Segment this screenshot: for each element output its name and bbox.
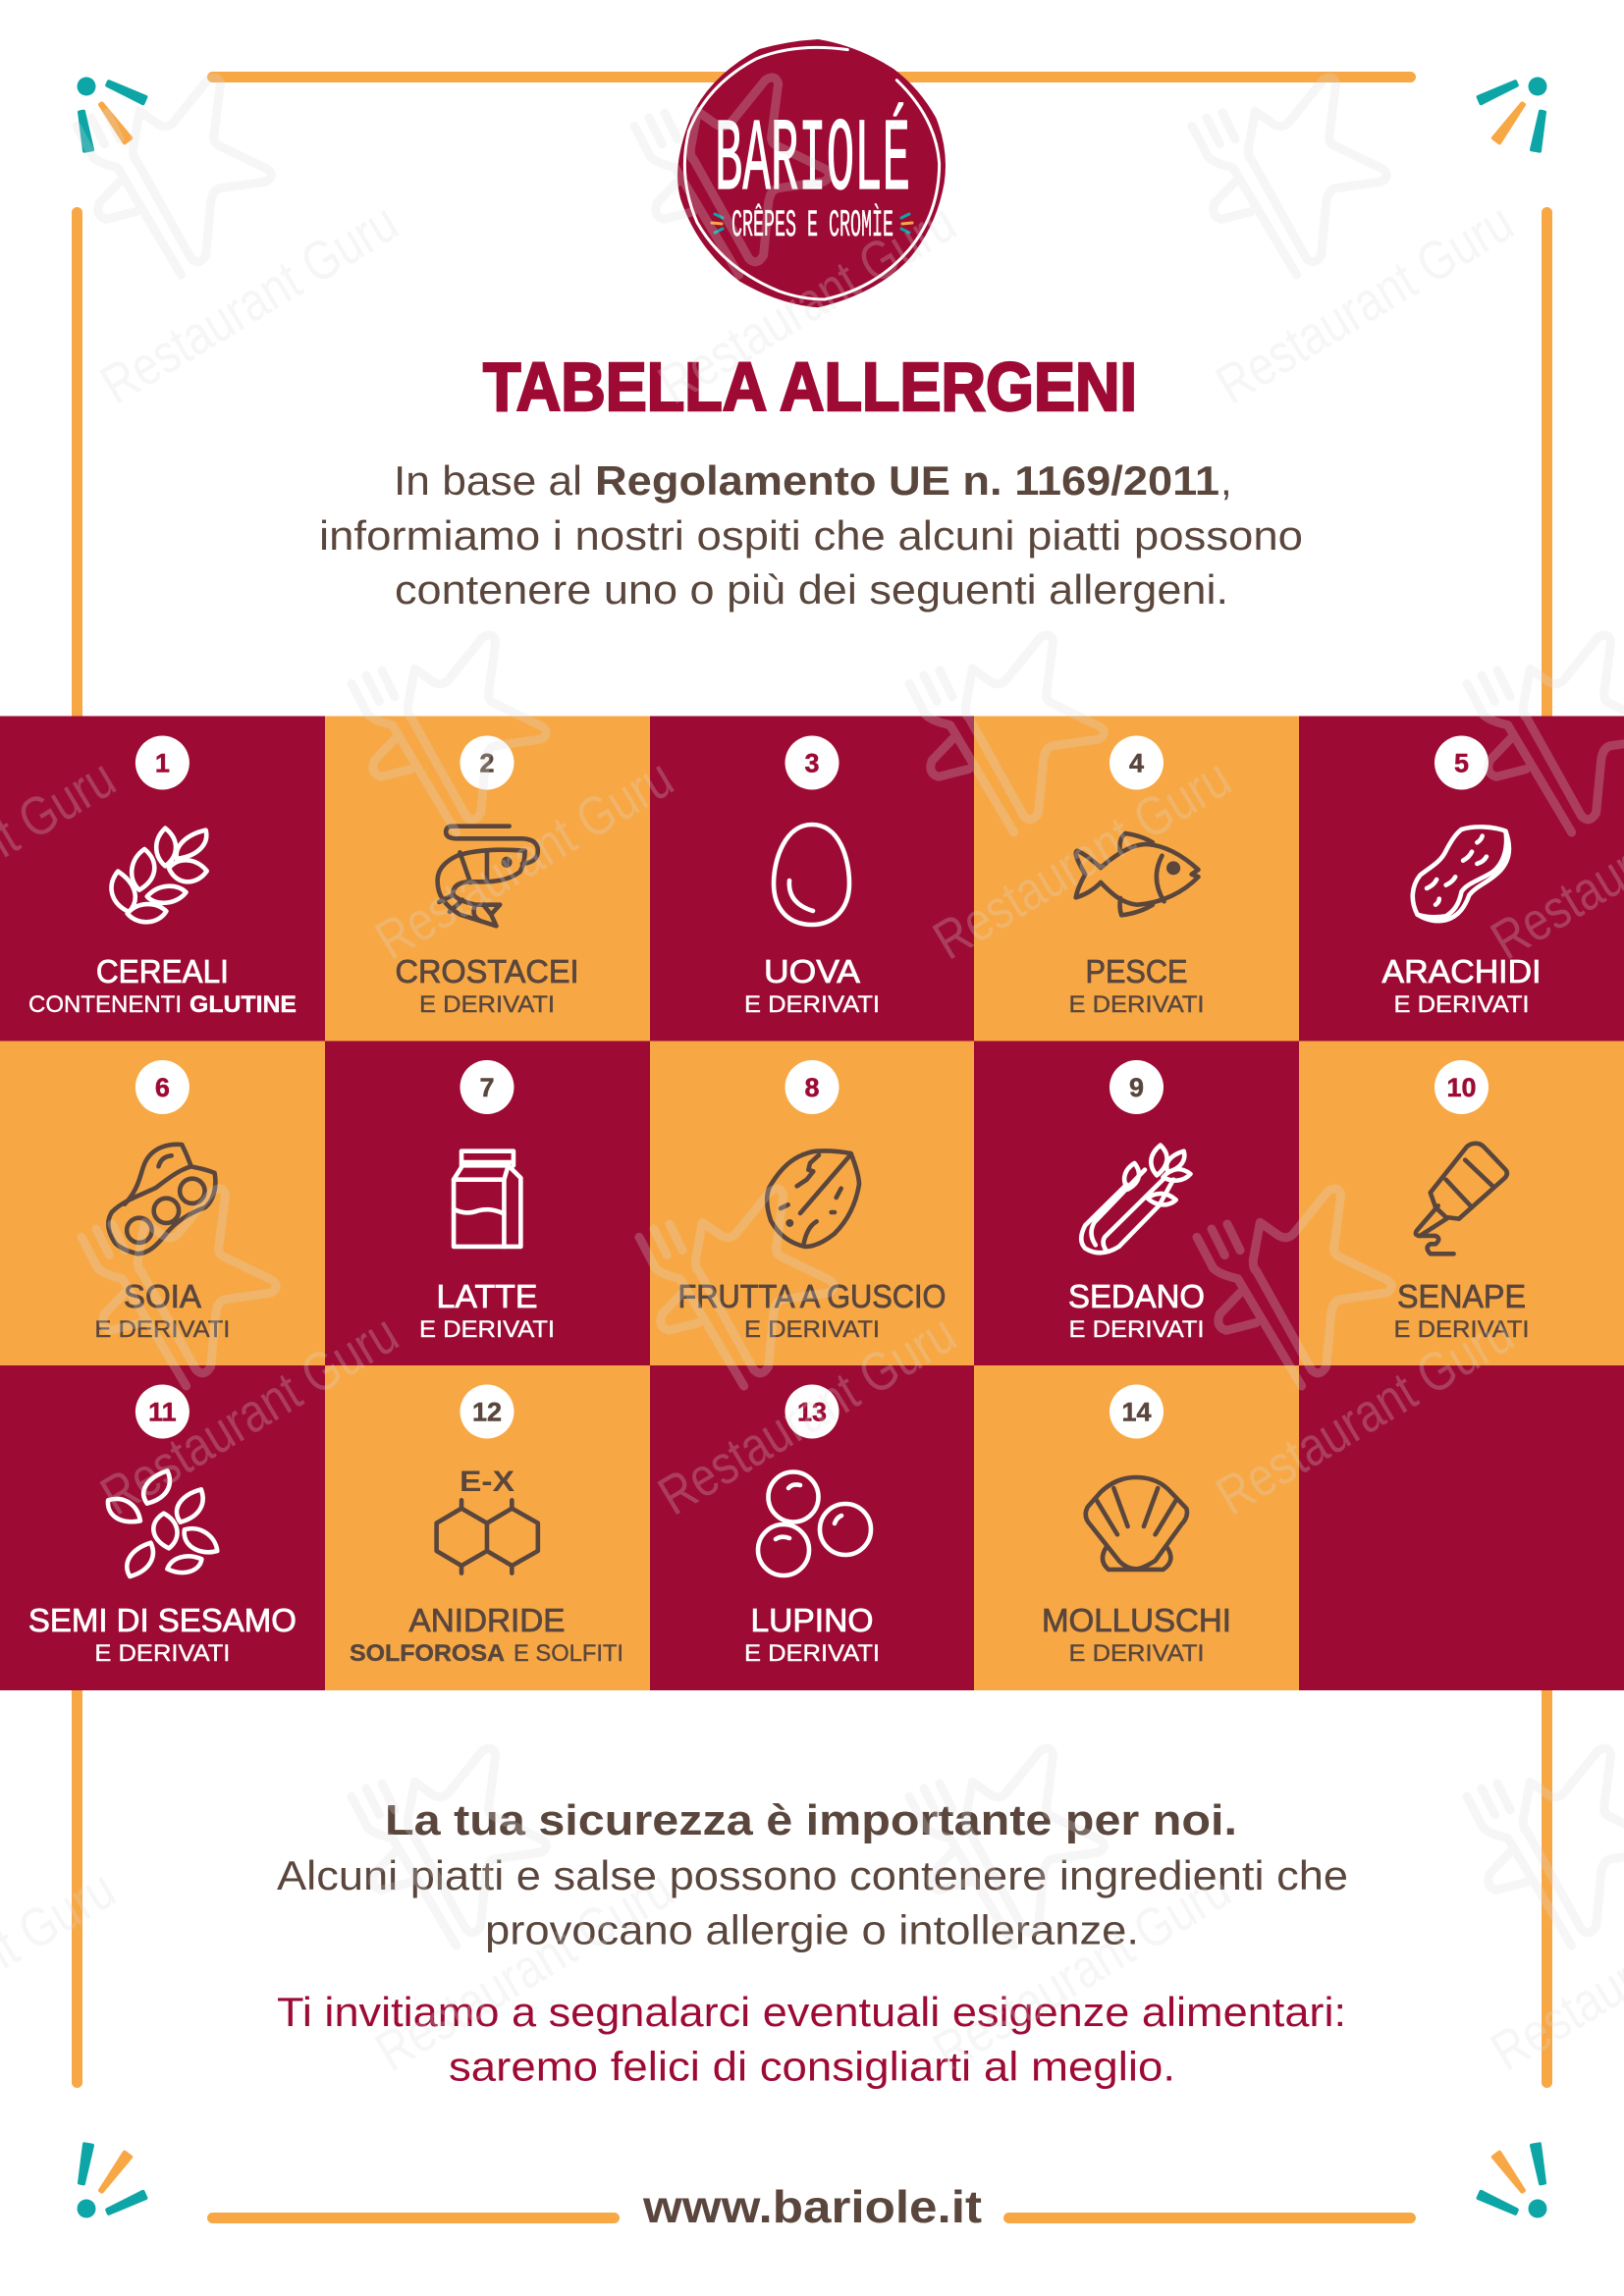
panel: 10 senape: 10 bbox=[1446, 1073, 1477, 1102]
panel: 3 uova: E DERIVATI bbox=[744, 991, 880, 1018]
intro text block: , bbox=[1220, 457, 1232, 504]
panel: 1 cereali: CEREALI bbox=[96, 953, 229, 989]
panel: 4 pesce: E DERIVATI bbox=[1068, 991, 1204, 1018]
panel: 12 anidride: E SOLFITI bbox=[514, 1640, 623, 1667]
watermark overlay: Restaurant Guru bbox=[923, 746, 1241, 971]
panel: 14 molluschi: MOLLUSCHI bbox=[1042, 1602, 1231, 1638]
icon: milk carton bbox=[454, 1151, 520, 1247]
panel: 14 molluschi bbox=[974, 1365, 1299, 1690]
icon: corner spark top-right bbox=[1479, 77, 1547, 151]
bottom frame lines bbox=[72, 1679, 1552, 2223]
panel: 3 uova: 3 bbox=[804, 748, 820, 777]
watermark overlay: Restaurant Guru bbox=[90, 1302, 408, 1526]
watermark overlay: Restaurant Guru bbox=[90, 190, 408, 415]
panel: 7 latte: 7 bbox=[479, 1073, 495, 1102]
allergen grid bbox=[0, 717, 1624, 1690]
panel: 1 cereali bbox=[0, 717, 325, 1041]
panel: 2 crostacei: 2 bbox=[479, 748, 495, 777]
panel: 7 latte: LATTE bbox=[436, 1278, 538, 1314]
panel: 3 uova: UOVA bbox=[764, 953, 860, 989]
panel: 8 frutta a guscio bbox=[650, 1041, 975, 1366]
panel: 8 frutta a guscio: E DERIVATI bbox=[744, 1316, 880, 1343]
text: invitation bbox=[277, 1989, 1346, 2089]
panel: 5 arachidi: 5 bbox=[1454, 748, 1469, 777]
panel: 12 anidride bbox=[325, 1365, 650, 1690]
panel: 13 lupino: E DERIVATI bbox=[744, 1640, 880, 1667]
watermark overlay: Restaurant Guru bbox=[648, 1302, 966, 1526]
icon: soy pod bbox=[108, 1145, 215, 1254]
panel: 7 latte: E DERIVATI bbox=[419, 1316, 555, 1343]
panel: 12 anidride: 12 bbox=[472, 1398, 502, 1427]
panel: 1 cereali: CONTENENTI bbox=[28, 991, 182, 1018]
intro text block: contenere uno o più dei seguenti allergeni. bbox=[395, 566, 1228, 613]
panel: 2 crostacei: CROSTACEI bbox=[395, 953, 579, 989]
footer text block bbox=[277, 1796, 1348, 2089]
text: invitation: saremo felici di consigliarti al meglio. bbox=[449, 2044, 1175, 2089]
panel: 4 pesce: 4 bbox=[1129, 748, 1144, 777]
title: TABELLA ALLERGENI bbox=[483, 348, 1137, 425]
panel: 13 lupino bbox=[650, 1365, 975, 1690]
text: invitation: Ti invitiamo a segnalarci eventuali esigenze alimentari: bbox=[277, 1989, 1346, 2035]
panel: 3 uova bbox=[650, 717, 975, 1041]
panel: 11 semi di sesamo: SEMI DI SESAMO bbox=[28, 1602, 297, 1638]
panel: 10 senape: E DERIVATI bbox=[1394, 1316, 1530, 1343]
panel: 14 molluschi: E DERIVATI bbox=[1068, 1640, 1204, 1667]
top frame lines bbox=[72, 72, 1552, 727]
website url: www.bariole.it bbox=[642, 2181, 982, 2232]
watermark overlay: Restaurant Guru bbox=[648, 190, 966, 415]
panel: 13 lupino: 13 bbox=[797, 1398, 827, 1427]
panel: 6 soia: E DERIVATI bbox=[94, 1316, 230, 1343]
icon: peanut bbox=[1413, 827, 1509, 921]
logo: Bariolé bbox=[677, 39, 946, 307]
icon: walnut bbox=[767, 1150, 859, 1247]
watermark overlay: Restaurant Guru bbox=[1206, 190, 1524, 415]
panel: 14 molluschi: 14 bbox=[1121, 1398, 1152, 1427]
intro text block: informiamo i nostri ospiti che alcuni piatti possono bbox=[319, 512, 1303, 559]
panel: 4 pesce bbox=[974, 717, 1299, 1041]
panel: 9 sedano bbox=[974, 1041, 1299, 1366]
text: allergy note: Alcuni piatti e salse possono contenere ingredienti che bbox=[277, 1852, 1348, 1898]
panel: empty crimson cell bbox=[1299, 1365, 1624, 1690]
icon: sesame seeds bbox=[108, 1470, 217, 1576]
text: allergy note bbox=[277, 1852, 1348, 1953]
panel: 10 senape: SENAPE bbox=[1397, 1278, 1526, 1314]
intro text block bbox=[319, 457, 1303, 613]
panel: 6 soia: 6 bbox=[155, 1073, 170, 1102]
panel: 11 semi di sesamo bbox=[0, 1365, 325, 1690]
intro text block: In base al bbox=[394, 457, 582, 504]
panel: 8 frutta a guscio: FRUTTA A GUSCIO bbox=[677, 1278, 947, 1314]
icon: fish bbox=[1076, 833, 1198, 915]
panel: 5 arachidi: ARACHIDI bbox=[1382, 953, 1542, 989]
panel: 11 semi di sesamo: E DERIVATI bbox=[94, 1640, 230, 1667]
icon: corner spark bottom-right bbox=[1479, 2144, 1547, 2218]
icon: corner spark top-left bbox=[77, 77, 145, 151]
watermark overlay: Restaurant Guru bbox=[365, 1857, 683, 2082]
panel: 12 anidride: ANIDRIDE bbox=[408, 1602, 566, 1638]
icon: shrimp bbox=[438, 827, 538, 926]
logo: Bariolé: BARIOLÉ bbox=[715, 102, 910, 220]
icon: lupin beans bbox=[758, 1472, 871, 1575]
watermark overlay: Restaurant Guru bbox=[365, 746, 683, 971]
logo: Bariolé: CRÊPES E CROMÌE bbox=[731, 203, 893, 247]
panel: 11 semi di sesamo: 11 bbox=[148, 1398, 177, 1427]
panel: 7 latte bbox=[325, 1041, 650, 1366]
icon: mustard bottle bbox=[1416, 1144, 1507, 1254]
icon: corner spark bottom-left bbox=[77, 2144, 145, 2218]
panel: 5 arachidi bbox=[1299, 717, 1624, 1041]
panel: 2 crostacei: E DERIVATI bbox=[419, 991, 555, 1018]
heading: safety: La tua sicurezza è importante per noi. bbox=[385, 1796, 1237, 1844]
panel: 9 sedano: SEDANO bbox=[1068, 1278, 1205, 1314]
text: allergy note: provocano allergie o intolleranze. bbox=[485, 1906, 1139, 1953]
intro text block: Regolamento UE n. 1169/2011 bbox=[595, 457, 1219, 504]
panel: 5 arachidi: E DERIVATI bbox=[1394, 991, 1530, 1018]
panel: 9 sedano: 9 bbox=[1129, 1073, 1144, 1102]
panel: 6 soia: SOIA bbox=[124, 1278, 201, 1314]
watermark overlay: Restaurant Guru bbox=[923, 1857, 1241, 2082]
icon: chemical molecule E-X bbox=[437, 1466, 538, 1574]
panel: 2 crostacei bbox=[325, 717, 650, 1041]
icon: chemical molecule E-X: E-X bbox=[460, 1466, 514, 1498]
panel: 9 sedano: E DERIVATI bbox=[1068, 1316, 1204, 1343]
panel: 4 pesce: PESCE bbox=[1086, 953, 1188, 989]
icon: celery bbox=[1081, 1146, 1191, 1253]
watermark overlay: Restaurant Guru bbox=[1206, 1302, 1524, 1526]
icon: shell bbox=[1086, 1477, 1187, 1570]
panel: 6 soia bbox=[0, 1041, 325, 1366]
panel: 1 cereali: GLUTINE bbox=[189, 991, 297, 1018]
panel: 12 anidride: SOLFOROSA bbox=[350, 1640, 505, 1667]
panel: 1 cereali: 1 bbox=[155, 748, 170, 777]
panel: 8 frutta a guscio: 8 bbox=[804, 1073, 820, 1102]
panel: 13 lupino: LUPINO bbox=[750, 1602, 874, 1638]
icon: egg bbox=[774, 825, 849, 925]
panel: 10 senape bbox=[1299, 1041, 1624, 1366]
icon: wheat bbox=[112, 828, 207, 922]
